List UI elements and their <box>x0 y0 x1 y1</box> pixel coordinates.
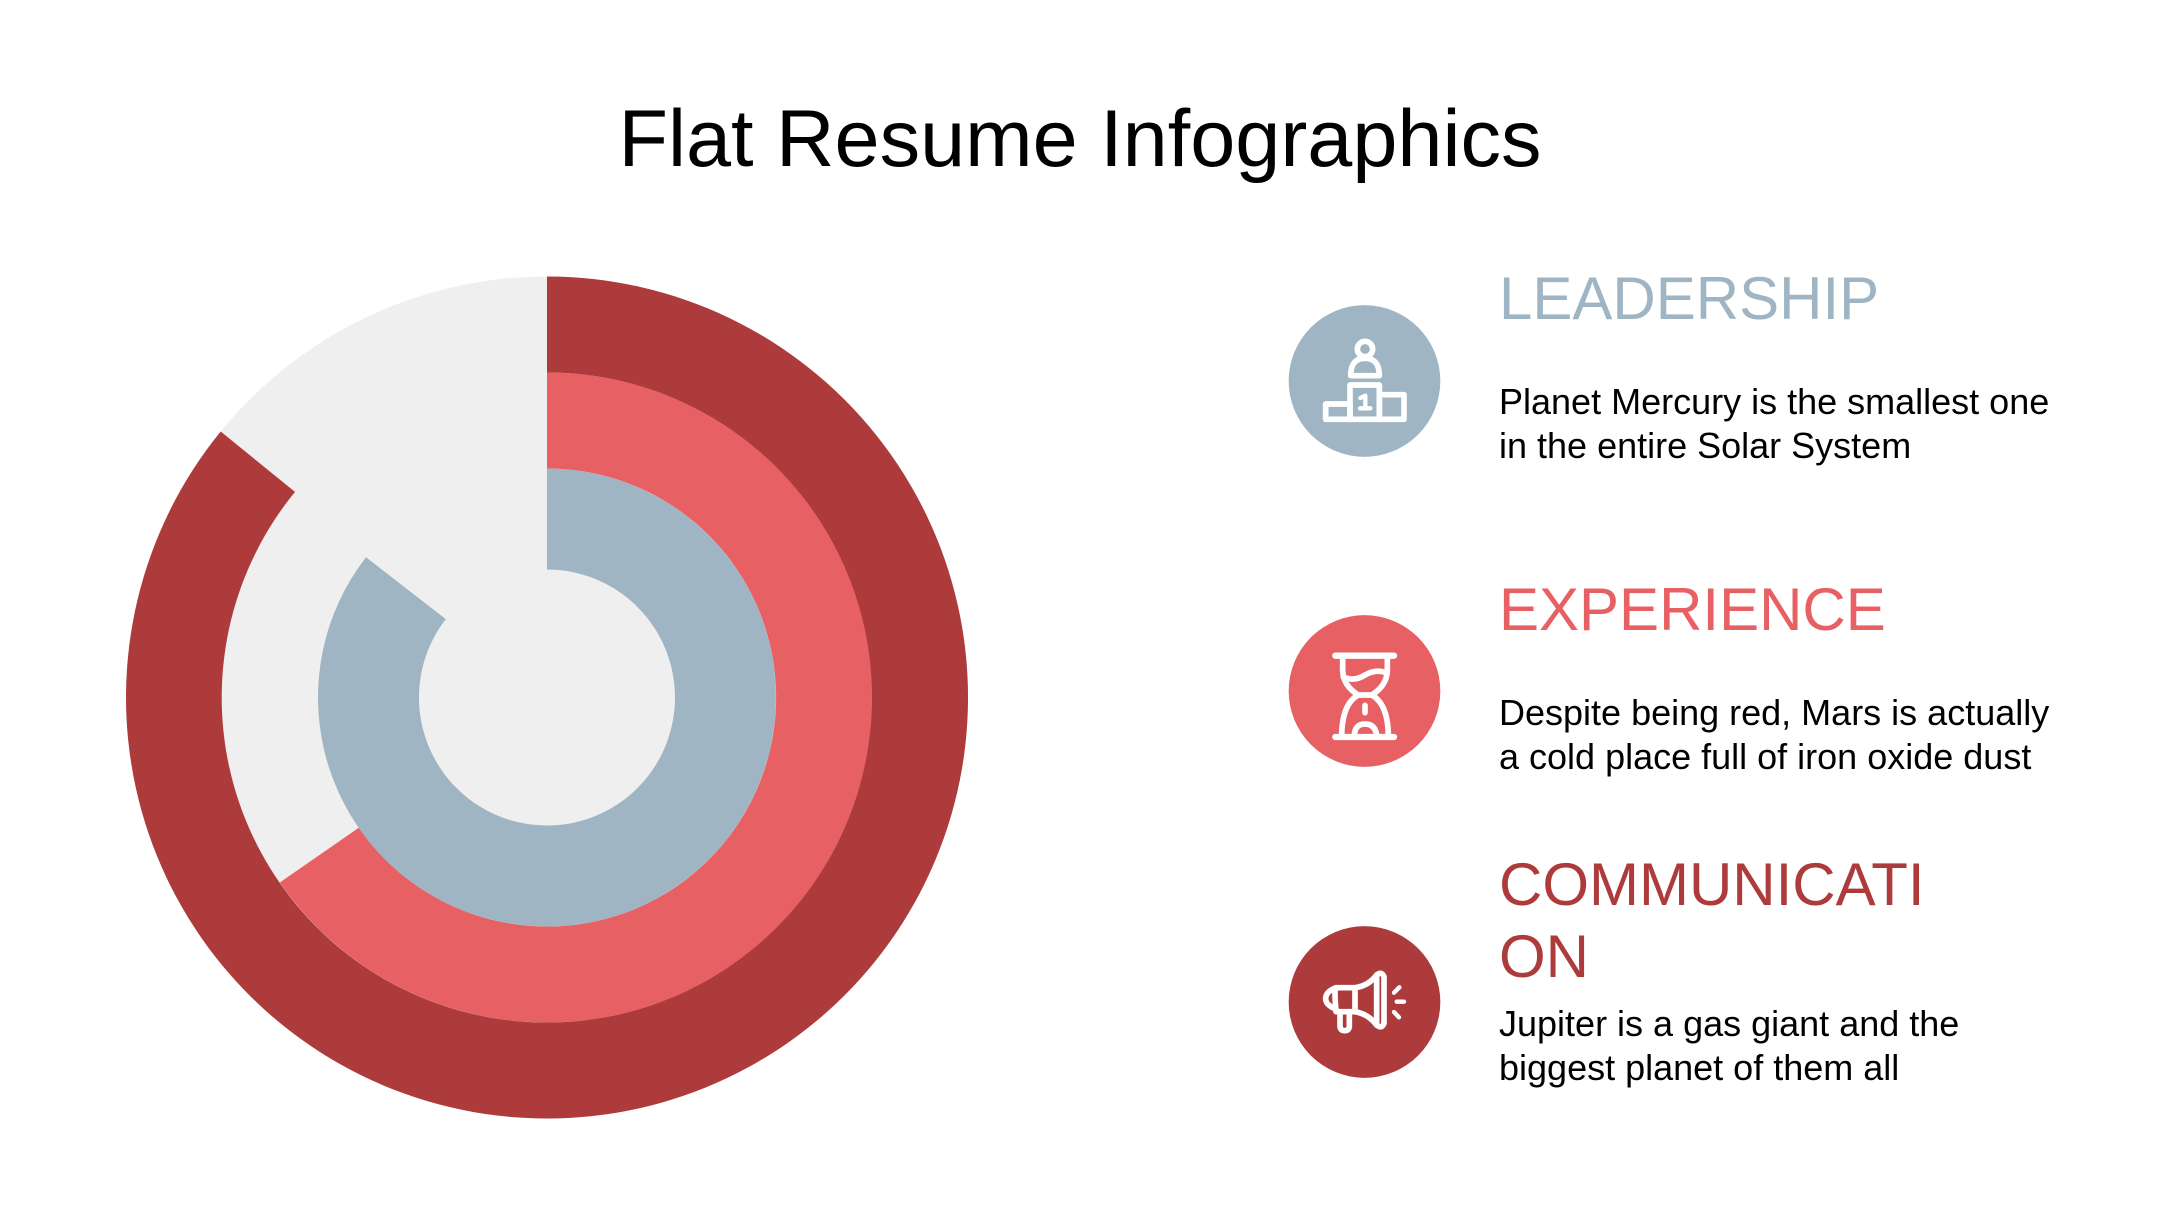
chart: concentric radial progress rings <box>126 276 968 1118</box>
item: communication <box>1289 851 1959 1088</box>
item: leadership <box>1289 265 2049 466</box>
ring: leadership, blue grey <box>318 468 776 926</box>
heading: communication: COMMUNICATI <box>1499 851 1925 918</box>
text: communication description: biggest planet of them all <box>1499 1047 1899 1088</box>
text: experience description: Despite being red, Mars is actually <box>1499 692 2049 733</box>
heading: experience: EXPERIENCE <box>1499 576 1886 643</box>
icon: podium <box>1289 305 1440 457</box>
icon: hourglass <box>1289 615 1440 767</box>
text: communication description: Jupiter is a gas giant and the <box>1499 1003 1959 1044</box>
text: leadership description: in the entire Solar System <box>1499 425 1911 466</box>
heading: communication: ON <box>1499 923 1589 990</box>
text: leadership description: Planet Mercury is the smallest one <box>1499 381 2049 422</box>
grey chart background disc <box>126 276 968 1118</box>
ring: experience, coral <box>280 372 872 1023</box>
item: experience <box>1289 576 2049 777</box>
title: Flat Resume Infographics <box>619 94 1541 184</box>
heading: leadership: LEADERSHIP <box>1499 265 1879 332</box>
text: experience description: a cold place full of iron oxide dust <box>1499 736 2031 777</box>
icon: megaphone <box>1289 926 1440 1078</box>
ring: communication, dark red <box>126 276 968 1118</box>
